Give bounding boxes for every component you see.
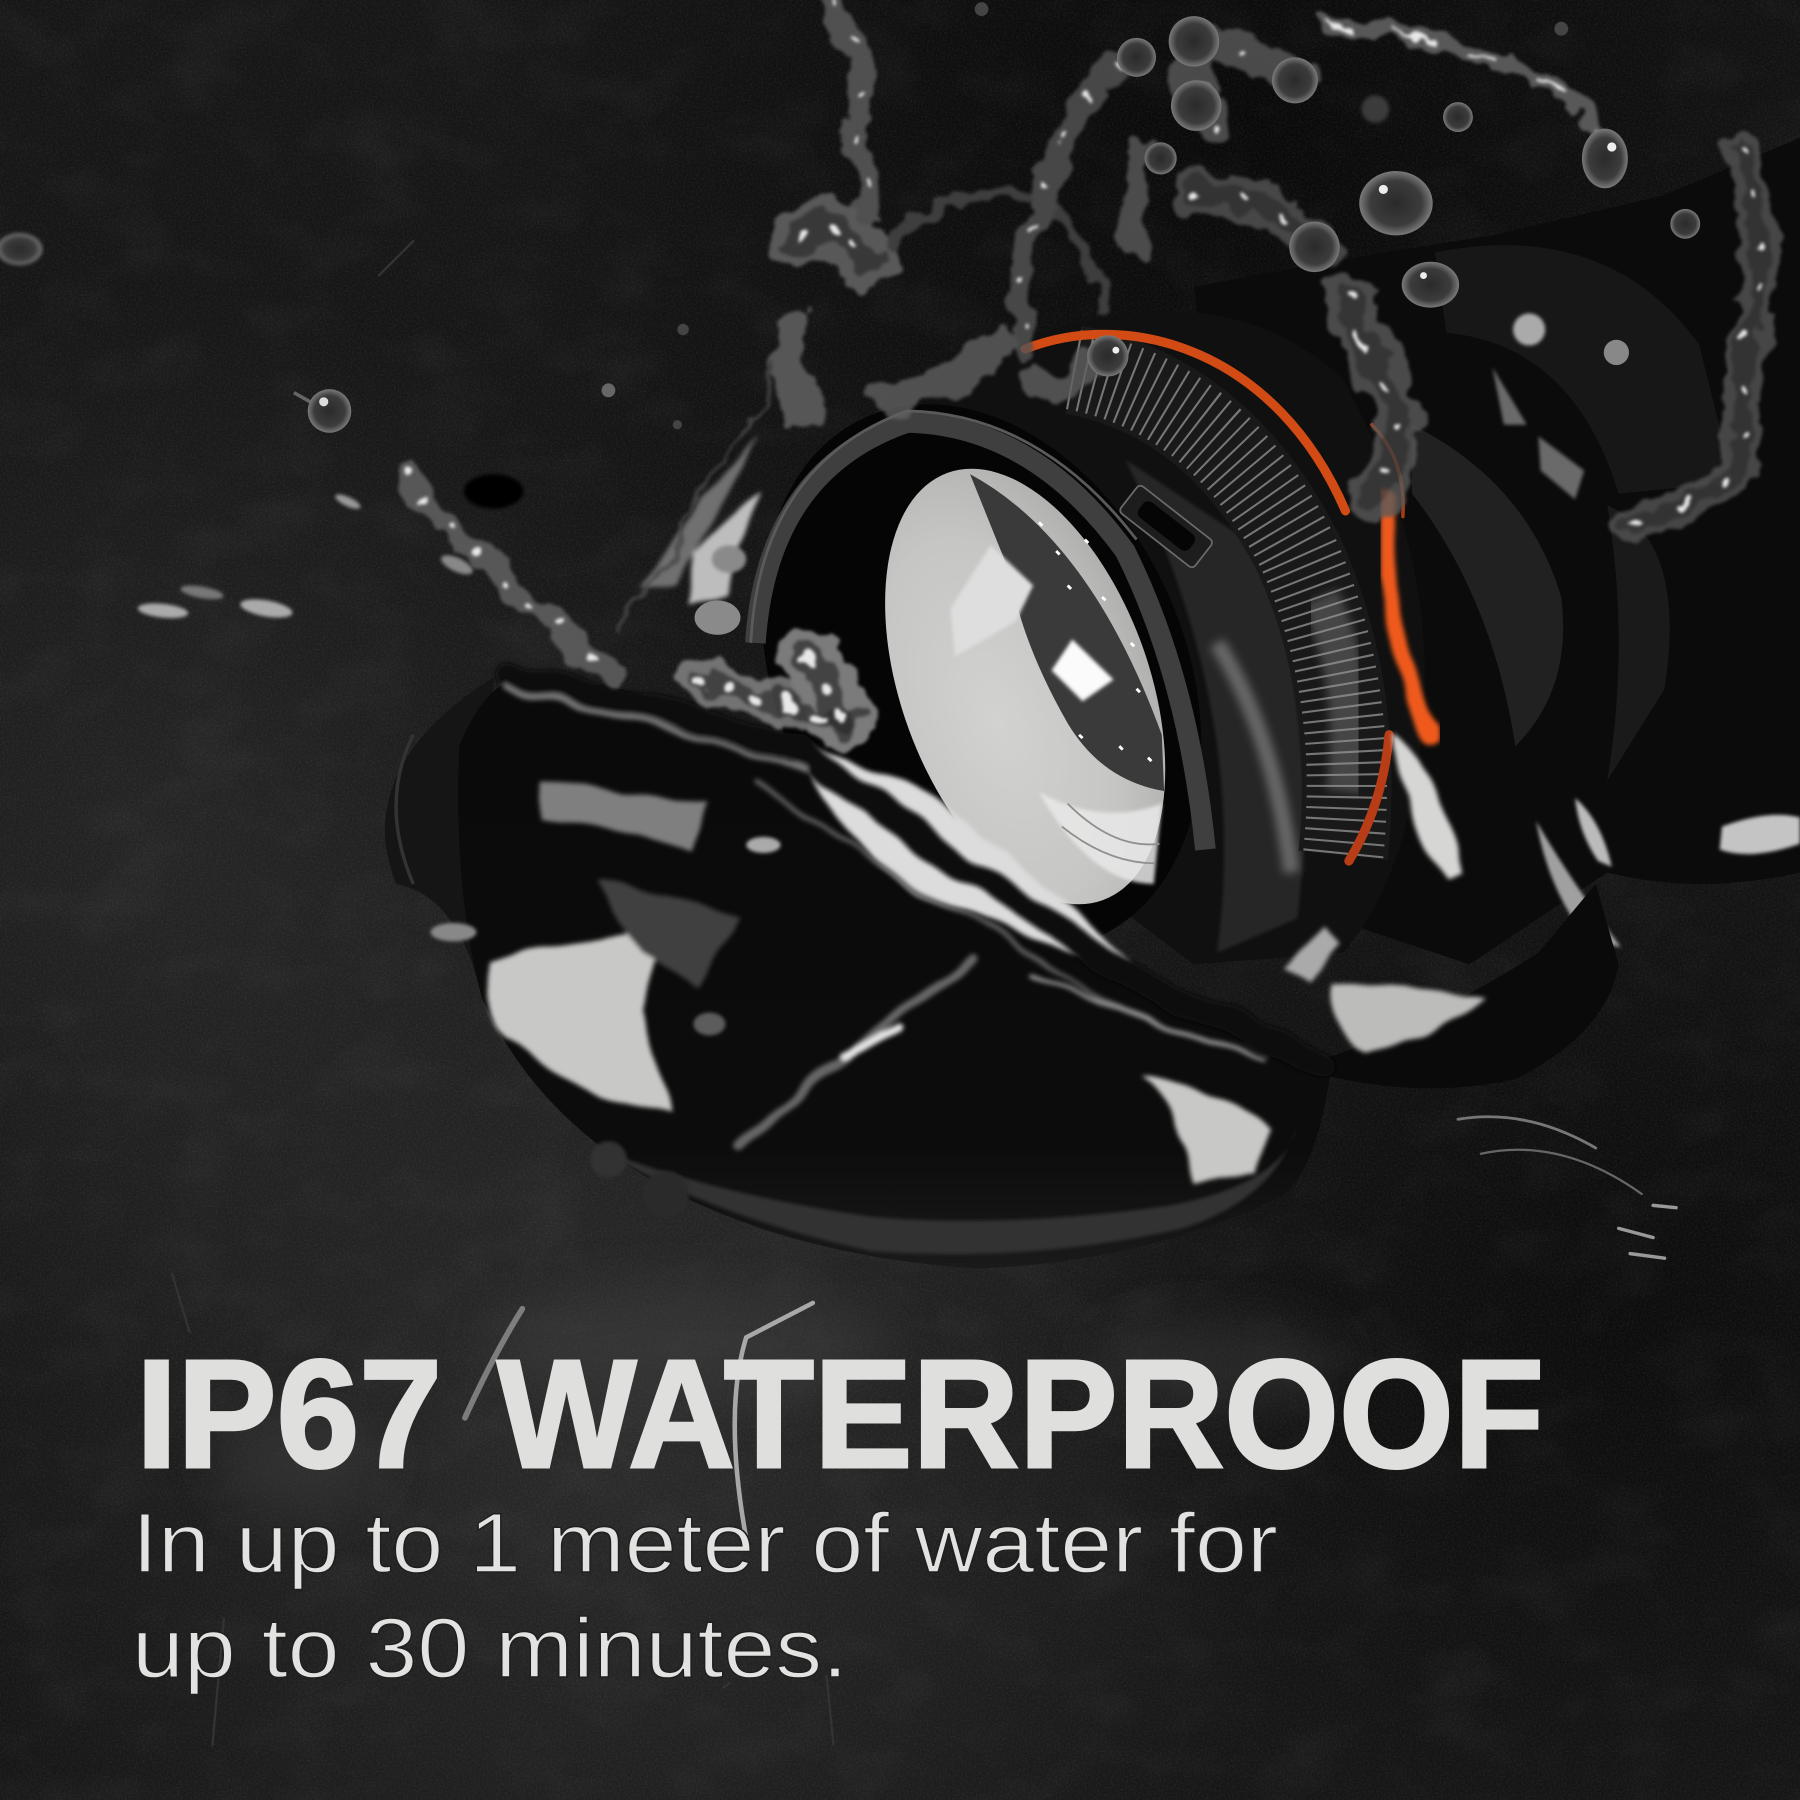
headline: IP67 [136, 1328, 442, 1500]
glassy core [700, 149, 1760, 729]
subheading [132, 1496, 1278, 1695]
lens glass [831, 431, 1219, 943]
orange accent ring [1025, 334, 1435, 861]
water mound [385, 677, 1619, 1269]
splash specular highlights [402, 0, 1760, 729]
subheading: up to 30 minutes. [132, 1601, 848, 1695]
ribbed grip ring [1073, 370, 1349, 855]
lens bezel [679, 334, 1284, 1021]
water splash streams [402, 0, 1760, 729]
subheading: In up to 1 meter of water for [132, 1496, 1278, 1590]
bright water highlights [489, 436, 1483, 1182]
water wave crest across lens [505, 677, 1320, 1148]
floor reflections and scratches [172, 241, 1676, 1745]
rear headlamp body and strap [1194, 138, 1800, 964]
headlamp front housing [827, 311, 1425, 964]
model badge [1118, 484, 1214, 569]
water droplets [0, 2, 1700, 1217]
headline: WATERPROOF [497, 1328, 1544, 1500]
